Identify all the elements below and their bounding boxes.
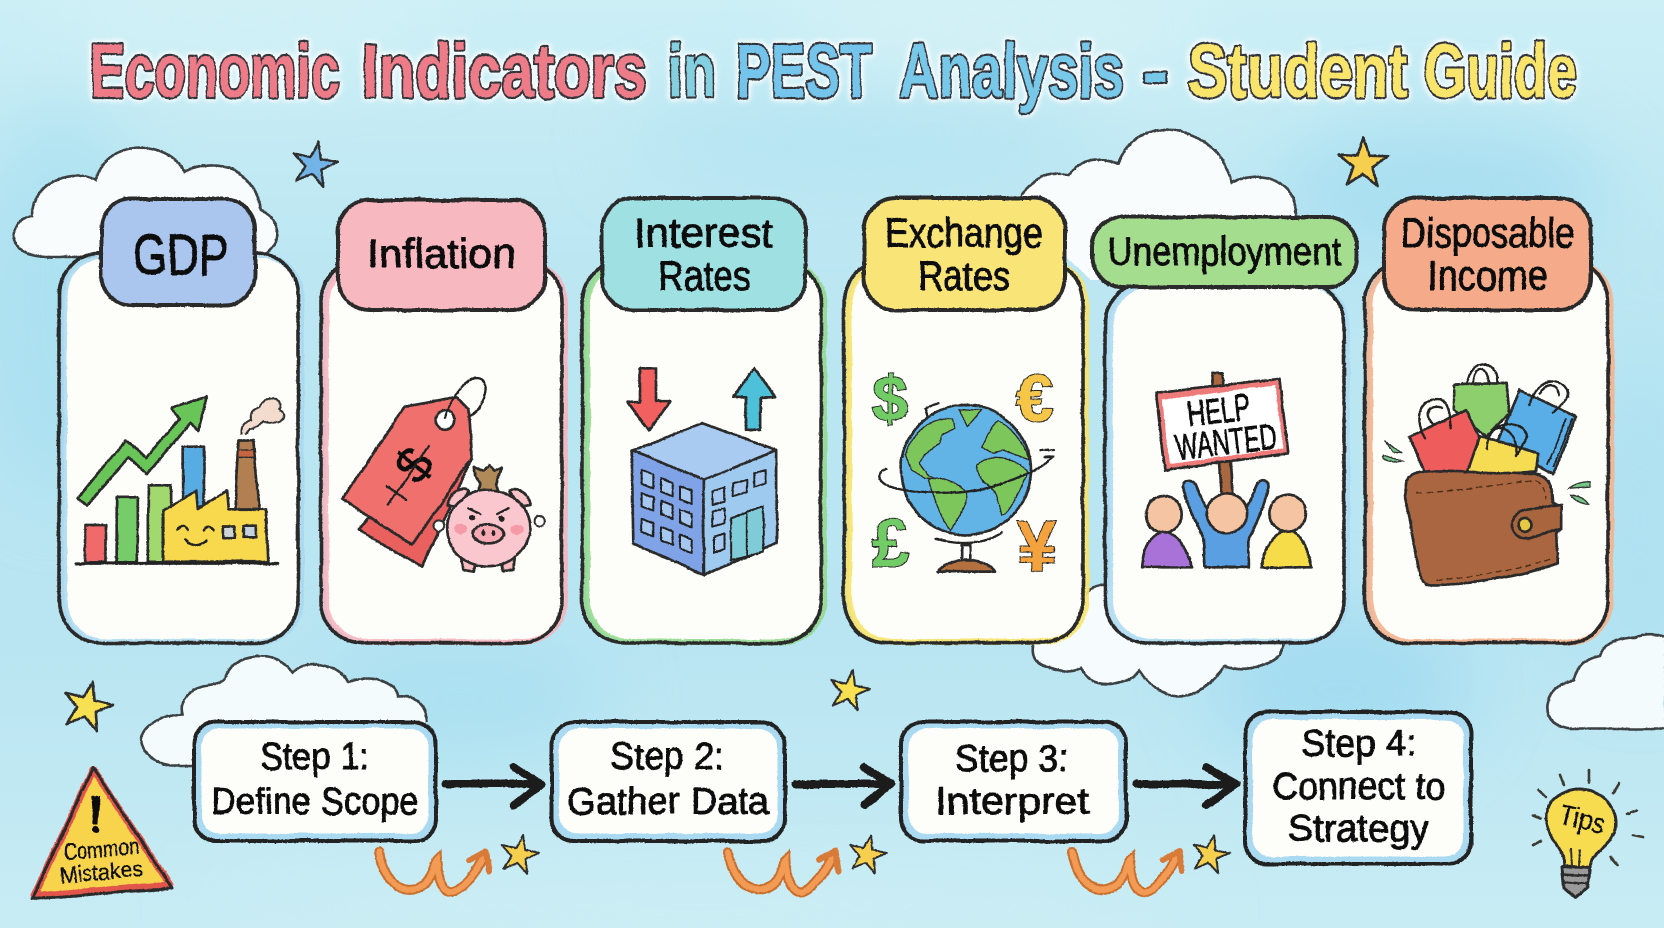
tab: Inflation	[338, 200, 545, 310]
step box: Step 3: Step 3:	[955, 738, 1068, 780]
arrow: step 2 to 3	[795, 767, 891, 805]
icon: arrows and bank building	[627, 368, 777, 575]
cloud: top centre	[1020, 130, 1296, 280]
title: -	[1142, 29, 1169, 114]
tab: Unemployment: Unemployment	[1108, 230, 1341, 274]
step box: Step 4: Step 4:	[1301, 723, 1416, 765]
title: Indicators	[362, 29, 647, 114]
title: Economic	[90, 29, 340, 114]
icon: tips light bulb: Tips	[1556, 799, 1608, 840]
icon: common mistakes warning triangle: Mistakes	[59, 855, 144, 888]
tab: Disposable Income	[1384, 198, 1591, 310]
icon: growth chart and factory	[76, 397, 284, 563]
panel: Unemployment	[1092, 217, 1357, 643]
icon: tips light bulb	[1533, 770, 1643, 898]
title: Guide	[1424, 29, 1577, 114]
star: yellow left	[58, 676, 117, 733]
tab: Disposable Income: Income	[1427, 252, 1548, 299]
cloud: right edge	[1547, 634, 1664, 729]
tab: Interest Rates	[602, 198, 806, 310]
tab: GDP	[101, 199, 255, 305]
tab: Disposable Income: Disposable	[1401, 209, 1575, 256]
icon: help wanted sign and people: WANTED	[1173, 415, 1279, 468]
cloud: behind step 1	[141, 656, 427, 770]
icon: wallet and shopping bags	[1383, 364, 1590, 585]
step box: Step 1: Step 1:	[260, 736, 369, 778]
star: yellow top right	[1338, 137, 1389, 186]
arrow: step 1 to 2	[446, 767, 541, 805]
icon: help wanted sign and people: HELP	[1185, 386, 1253, 434]
title: in	[668, 29, 716, 114]
icon: globe and currencies	[872, 363, 1057, 587]
step box: Step 3: Interpret	[935, 781, 1089, 823]
cloud: middle below cards	[1033, 585, 1290, 696]
icon: globe and currencies: £	[872, 507, 909, 581]
card	[1365, 260, 1611, 643]
card	[321, 260, 565, 643]
star: blue top	[288, 137, 341, 189]
tab: Interest Rates: Rates	[658, 252, 751, 299]
step box: Step 3	[901, 722, 1126, 841]
squiggle arrow 1	[379, 851, 489, 892]
step box: Step 1: Define Scope	[211, 781, 419, 823]
tab: Inflation: Inflation	[367, 230, 516, 277]
cloud: top left	[14, 147, 278, 258]
tab: Exchange Rates: Rates	[918, 252, 1010, 299]
step box: Step 2	[552, 722, 785, 841]
step box: Step 4	[1245, 712, 1471, 864]
icon: globe and currencies: $	[872, 365, 908, 435]
tab: Exchange Rates: Exchange	[885, 209, 1043, 256]
step box: Step 2: Step 2:	[610, 736, 724, 778]
title: Student	[1188, 29, 1408, 114]
icon: help wanted sign and people	[1142, 373, 1312, 567]
icon: globe and currencies: €	[1016, 363, 1054, 437]
tab: GDP: GDP	[133, 223, 228, 288]
title	[90, 29, 1577, 114]
title: PEST	[736, 29, 872, 114]
star: small 1	[497, 831, 542, 875]
title: Analysis	[899, 29, 1124, 114]
step box: Step 1	[194, 722, 436, 841]
card	[1105, 282, 1347, 643]
tab: Exchange Rates	[864, 198, 1065, 310]
star: small 2	[845, 831, 890, 875]
star: small 3	[1188, 831, 1233, 875]
icon: price tag and piggy bank: $	[383, 437, 445, 493]
card	[582, 260, 824, 643]
panel: Exchange Rates	[844, 198, 1086, 643]
panel: Disposable Income	[1365, 198, 1611, 643]
tab: Interest Rates: Interest	[634, 209, 773, 256]
icon: price tag and piggy bank	[342, 378, 545, 572]
card	[844, 260, 1086, 643]
star: yellow middle	[826, 666, 873, 712]
tab: Unemployment	[1092, 217, 1357, 287]
icon: common mistakes warning triangle: Common	[62, 833, 140, 865]
squiggle arrow 2	[728, 851, 838, 892]
panel: Inflation	[321, 200, 565, 643]
card	[59, 253, 301, 643]
step box: Step 4: Strategy	[1288, 808, 1429, 850]
arrow: step 3 to 4	[1137, 767, 1236, 805]
panel: Interest Rates	[582, 198, 824, 643]
step box: Step 4: Connect to	[1272, 766, 1445, 808]
icon: common mistakes warning triangle	[32, 768, 172, 899]
panel: GDP	[59, 199, 301, 643]
icon: globe and currencies: ¥	[1017, 507, 1057, 587]
squiggle arrow 3	[1072, 851, 1182, 892]
step box: Step 2: Gather Data	[567, 781, 770, 823]
